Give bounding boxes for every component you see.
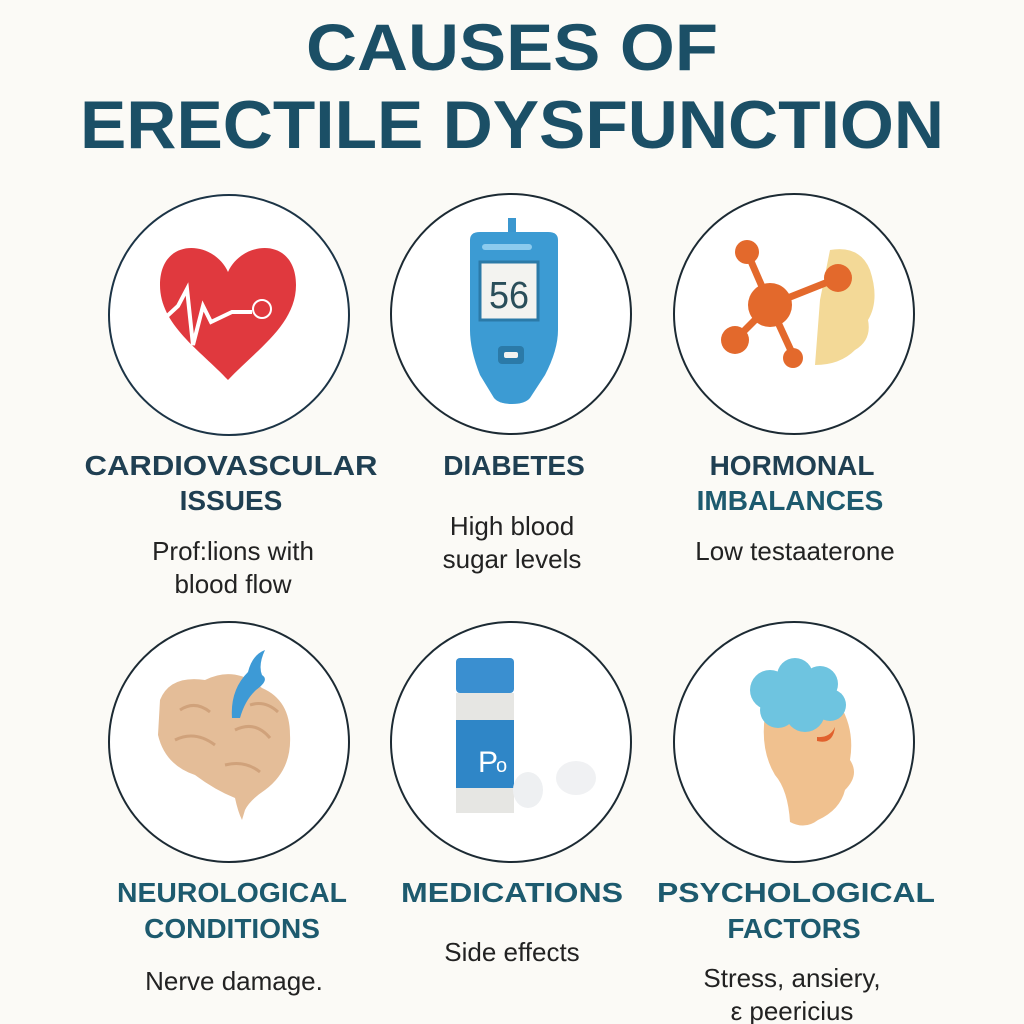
panel: cardiovascular (84, 195, 378, 599)
heading: NEUROLOGICAL (117, 877, 347, 908)
panel: neurological (109, 622, 349, 996)
icon: hormone molecule (674, 194, 914, 434)
panel: psychological (657, 622, 935, 1024)
text block: High blood (450, 511, 574, 541)
heading (84, 450, 378, 516)
heading: ISSUES (180, 485, 282, 516)
heading (657, 877, 935, 944)
text block: Low testaaterone (695, 536, 895, 566)
icon: brain (109, 622, 349, 862)
panel: diabetes (391, 194, 631, 574)
heading: CONDITIONS (144, 913, 320, 944)
title: CAUSES OF (306, 10, 718, 84)
heading: FACTORS (727, 913, 861, 944)
text block: blood flow (174, 569, 292, 599)
panel: hormonal (674, 194, 914, 566)
icon: glucose meter (391, 194, 631, 434)
title (80, 10, 944, 163)
icon: head with cloud (674, 622, 914, 862)
icon: heart (109, 195, 349, 435)
text block: Prof:lions with (152, 536, 314, 566)
icon: pill bottle: o (496, 755, 507, 777)
icon: pill bottle: P (478, 746, 498, 779)
heading: CARDIOVASCULAR (84, 450, 378, 481)
heading: HORMONAL (710, 450, 874, 481)
text block: Nerve damage. (145, 966, 323, 996)
icon: pill bottle (391, 622, 631, 862)
heading: MEDICATIONS (401, 877, 623, 908)
heading (697, 450, 883, 516)
icon: glucose meter: 56 (489, 275, 529, 317)
text block: Side effects (444, 937, 580, 967)
title: ERECTILE DYSFUNCTION (80, 87, 944, 163)
heading: DIABETES (443, 450, 585, 481)
panel: medications (391, 622, 631, 967)
heading (117, 877, 347, 944)
text block: sugar levels (443, 544, 581, 574)
heading: IMBALANCES (697, 485, 883, 516)
text block: Stress, ansiery, (703, 963, 881, 993)
heading: PSYCHOLOGICAL (657, 877, 935, 908)
